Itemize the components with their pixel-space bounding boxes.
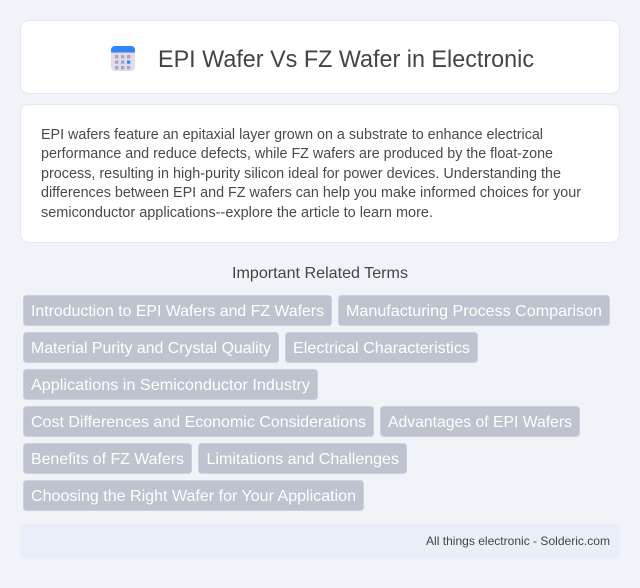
tag bbox=[24, 332, 278, 362]
tag: Advantages of EPI Wafers bbox=[388, 414, 572, 431]
tag: Limitations and Challenges bbox=[206, 451, 399, 468]
tag bbox=[24, 370, 318, 400]
tag bbox=[24, 444, 192, 474]
tag bbox=[286, 332, 478, 362]
tag bbox=[338, 296, 610, 326]
tag bbox=[24, 296, 332, 326]
tag: Applications in Semiconductor Industry bbox=[31, 377, 310, 394]
tag bbox=[24, 406, 374, 436]
tag: Manufacturing Process Comparison bbox=[346, 303, 602, 320]
summary paragraph: semiconductor applications--explore the article to learn more. bbox=[41, 205, 433, 221]
summary paragraph: EPI wafers feature an epitaxial layer grown on a substrate to enhance electrical bbox=[41, 127, 543, 143]
tag: Choosing the Right Wafer for Your Application bbox=[31, 488, 356, 505]
tag: Material Purity and Crystal Quality bbox=[31, 340, 271, 357]
tag bbox=[24, 480, 364, 510]
footer credit: All things electronic - Solderic.com bbox=[426, 534, 610, 548]
tag: Cost Differences and Economic Considerations bbox=[31, 414, 366, 431]
header card bbox=[20, 20, 620, 94]
footer bbox=[20, 524, 620, 558]
heading: related terms: Important Related Terms bbox=[232, 265, 408, 282]
summary paragraph: process, resulting in high-purity silicon ideal for power devices. Understanding the bbox=[41, 166, 561, 182]
icon: calendar bbox=[111, 46, 135, 71]
summary paragraph: performance and reduce defects, while FZ wafers are produced by the float-zone bbox=[41, 146, 553, 162]
summary paragraph: differences between EPI and FZ wafers can help you make informed choices for your bbox=[41, 185, 581, 201]
summary paragraph bbox=[41, 127, 581, 221]
panel: summary text bbox=[20, 104, 620, 242]
tag: Electrical Characteristics bbox=[293, 340, 470, 357]
tag bbox=[198, 444, 406, 474]
tag: Introduction to EPI Wafers and FZ Wafers bbox=[31, 303, 324, 320]
title: EPI Wafer Vs FZ Wafer in Electronic bbox=[158, 46, 534, 73]
tag list bbox=[24, 296, 610, 510]
tag: Benefits of FZ Wafers bbox=[31, 451, 184, 468]
tag bbox=[380, 406, 580, 436]
